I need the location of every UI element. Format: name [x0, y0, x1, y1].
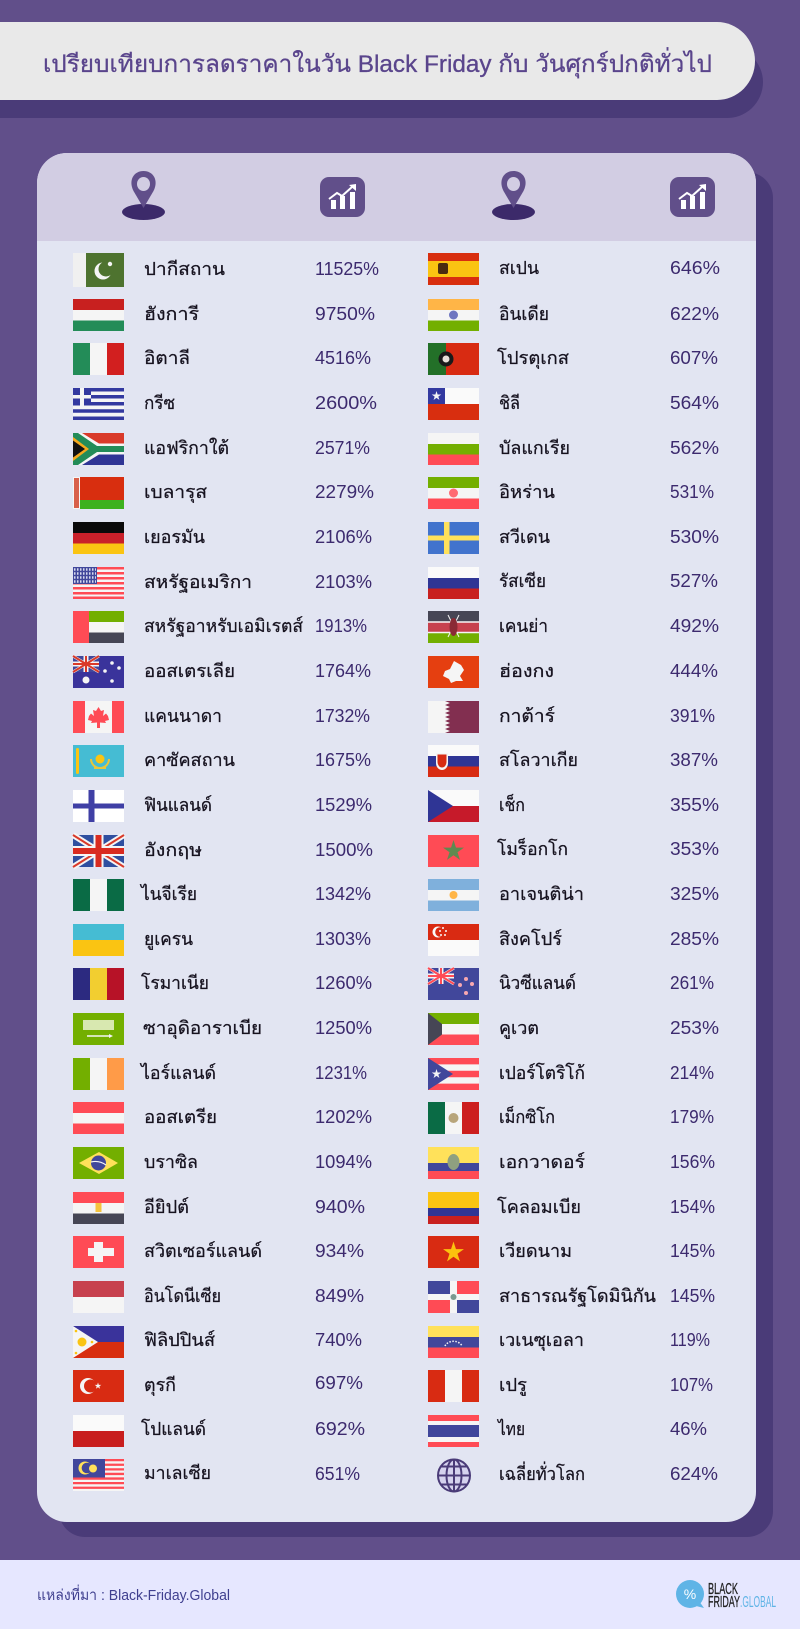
row: Egypt: อียิปต์: [144, 1197, 189, 1217]
row: Thailand: ไทย: [496, 1418, 525, 1439]
row: Malaysia: มาเลเซีย: [144, 1463, 211, 1483]
row: Russia: รัสเซีย: [499, 571, 546, 591]
flag: Ecuador: [428, 1147, 479, 1179]
row: Italy: 4516%: [315, 348, 371, 368]
row: World average: [438, 1460, 718, 1492]
row: Morocco: 353%: [670, 839, 719, 859]
row: Kazakhstan: 1675%: [315, 750, 371, 770]
row: Hungary: ฮังการี: [144, 304, 199, 324]
row: Venezuela: เวเนซุเอลา: [499, 1330, 584, 1351]
row: Peru: เปรู: [499, 1375, 527, 1396]
flag: Belarus: [73, 477, 124, 509]
icon: location pin left: [122, 171, 165, 220]
row: Kenya: [428, 611, 719, 643]
footer band: [0, 1560, 800, 1629]
row: Kenya: เคนย่า: [499, 616, 548, 636]
flag: Argentina: [428, 879, 479, 911]
flag: Turkey: [73, 1370, 124, 1402]
left column rows: [73, 253, 379, 1491]
row: Puerto Rico: เปอร์โตริโก้: [499, 1062, 585, 1083]
flag: Egypt: [73, 1192, 124, 1224]
title banner: [0, 22, 763, 118]
icon: globe: [438, 1460, 470, 1492]
row: Pakistan: 11525%: [315, 259, 379, 279]
row: Bulgaria: 562%: [670, 438, 719, 458]
row: Colombia: [428, 1192, 715, 1224]
row: Portugal: [428, 343, 718, 375]
row: Chile: 564%: [670, 393, 719, 413]
row: Austria: [73, 1102, 372, 1134]
row: Switzerland: 934%: [315, 1241, 364, 1261]
row: Morocco: [428, 835, 719, 867]
flag: United States: [73, 567, 124, 599]
row: Sweden: สวีเดน: [499, 527, 550, 547]
row: Hong Kong: [428, 656, 718, 688]
row: South Africa: แอฟริกาใต้: [144, 437, 229, 458]
row: Russia: [428, 567, 718, 599]
row: United Kingdom: 1500%: [315, 840, 373, 860]
row: Philippines: 740%: [315, 1330, 362, 1350]
row: Vietnam: 145%: [670, 1241, 715, 1261]
row: UAE: สหรัฐอาหรับเอมิเรตส์: [144, 616, 303, 637]
row: Switzerland: [73, 1236, 364, 1268]
row: Greece: [73, 388, 377, 420]
row: Colombia: 154%: [670, 1197, 715, 1217]
flag: Dominican Republic: [428, 1281, 479, 1313]
row: South Africa: 2571%: [315, 438, 370, 458]
flag: Nigeria: [73, 879, 124, 911]
flag: Greece: [73, 388, 124, 420]
row: India: อินเดีย: [499, 304, 549, 324]
row: Thailand: 46%: [670, 1419, 707, 1439]
row: Ukraine: [73, 924, 371, 956]
row: Bulgaria: [428, 433, 719, 465]
row: Nigeria: 1342%: [315, 884, 371, 904]
row: New Zealand: นิวซีแลนด์: [499, 973, 576, 993]
flag: Italy: [73, 343, 124, 375]
icon: chart right: [670, 177, 715, 217]
row: United Kingdom: อังกฤษ: [144, 840, 202, 860]
row: Bulgaria: บัลแกเรีย: [499, 438, 570, 458]
row: Czech Republic: 355%: [670, 795, 719, 815]
row: Spain: [428, 253, 720, 285]
row: Kuwait: 253%: [670, 1018, 719, 1038]
flag: Hong Kong: [428, 656, 479, 688]
row: Iran: อิหร่าน: [499, 482, 555, 502]
row: Sweden: 530%: [670, 527, 719, 547]
row: Saudi Arabia: 1250%: [315, 1018, 372, 1038]
row: Egypt: [73, 1192, 365, 1224]
flag: Slovakia: [428, 745, 479, 777]
flag: Malaysia: [73, 1459, 124, 1491]
row: Ukraine: 1303%: [315, 929, 371, 949]
flag: Ukraine: [73, 924, 124, 956]
row: New Zealand: 261%: [670, 973, 714, 993]
flag: Kazakhstan: [73, 745, 124, 777]
flag: Qatar: [428, 701, 479, 733]
flag: Spain: [428, 253, 479, 285]
row: Australia: [73, 656, 371, 688]
flag: Austria: [73, 1102, 124, 1134]
row: Kenya: 492%: [670, 616, 719, 636]
row: Kazakhstan: [73, 745, 371, 777]
row: Philippines: ฟิลิปปินส์: [144, 1330, 215, 1350]
row: Singapore: [428, 924, 719, 956]
row: Malaysia: 651%: [315, 1464, 360, 1484]
row: Slovakia: [428, 745, 718, 777]
logo: Black Friday Global: BLACK: [708, 1581, 738, 1598]
row: Ireland: [73, 1058, 367, 1090]
row: Poland: [73, 1415, 365, 1447]
row: Hungary: 9750%: [315, 304, 375, 324]
row: Belarus: เบลารุส: [144, 482, 207, 503]
flag: Finland: [73, 790, 124, 822]
row: Puerto Rico: [428, 1058, 714, 1090]
row: Spain: สเปน: [499, 258, 539, 278]
row: Iran: [428, 477, 714, 509]
flag: United Kingdom: [73, 835, 124, 867]
row: Finland: [73, 790, 372, 822]
flag: Pakistan: [73, 253, 124, 287]
row: Ecuador: เอกวาดอร์: [499, 1152, 585, 1172]
flag: Kuwait: [428, 1013, 479, 1045]
row: Singapore: สิงคโปร์: [499, 928, 562, 949]
row: Brazil: [73, 1147, 372, 1179]
flag: Brazil: [73, 1147, 124, 1179]
row: Greece: กรีซ: [144, 393, 175, 413]
row: Peru: [428, 1370, 713, 1402]
source note: แหล่งที่มา : Black-Friday.Global: [37, 1584, 230, 1604]
row: Qatar: 391%: [670, 706, 715, 726]
row: Vietnam: เวียดนาม: [499, 1241, 572, 1261]
row: Kuwait: [428, 1013, 719, 1045]
row: Finland: 1529%: [315, 795, 372, 815]
row: Finland: ฟินแลนด์: [144, 795, 212, 815]
row: Canada: 1732%: [315, 706, 370, 726]
row: Germany: [73, 522, 372, 554]
row: Czech Republic: [428, 790, 719, 822]
flag: Peru: [428, 1370, 479, 1402]
row: Thailand: [428, 1415, 707, 1447]
row: Vietnam: [428, 1236, 715, 1268]
row: India: [428, 299, 719, 331]
flag: South Africa: [73, 433, 124, 465]
row: World average: 624%: [670, 1464, 718, 1484]
row: UAE: [73, 611, 367, 643]
row: Portugal: 607%: [670, 348, 718, 368]
flag: Switzerland: [73, 1236, 124, 1268]
title: เปรียบเทียบการลดราคาในวัน Black Friday กับ วันศุกร์ปกติทั่วไป: [43, 47, 712, 79]
row: Belarus: [73, 477, 374, 509]
row: Russia: 527%: [670, 571, 718, 591]
flag: Iran: [428, 477, 479, 509]
flag: Romania: [73, 968, 124, 1000]
flag: Ireland: [73, 1058, 124, 1090]
row: Nigeria: ไนจีเรีย: [139, 883, 197, 904]
row: Canada: [73, 701, 370, 733]
row: Mexico: 179%: [670, 1107, 714, 1127]
row: Venezuela: 119%: [670, 1330, 710, 1350]
row: Czech Republic: เช็ก: [499, 793, 525, 815]
row: Austria: ออสเตรีย: [144, 1107, 217, 1127]
flag: Russia: [428, 567, 479, 599]
flag: Portugal: [428, 343, 479, 375]
row: Greece: 2600%: [315, 393, 377, 413]
row: Germany: เยอรมัน: [144, 527, 205, 547]
row: Egypt: 940%: [315, 1197, 365, 1217]
row: Slovakia: 387%: [670, 750, 718, 770]
row: Australia: ออสเตรเลีย: [144, 661, 235, 681]
row: Colombia: โคลอมเบีย: [497, 1196, 581, 1217]
row: Italy: [73, 343, 371, 375]
row: Morocco: โมร็อกโก: [497, 837, 568, 859]
row: Brazil: 1094%: [315, 1152, 372, 1172]
flag: Canada: [73, 701, 124, 733]
flag: Bulgaria: [428, 433, 479, 465]
row: Qatar: กาต้าร์: [499, 706, 555, 726]
row: Slovakia: สโลวาเกีย: [499, 749, 578, 770]
row: Austria: 1202%: [315, 1107, 372, 1127]
icon: chart left: [320, 177, 365, 217]
row: Spain: 646%: [670, 258, 720, 278]
row: Philippines: [73, 1326, 362, 1358]
row: Portugal: โปรตุเกส: [497, 347, 569, 369]
flag: Morocco: [428, 835, 479, 867]
logo: Black Friday Global: FRIDAY: [708, 1594, 740, 1611]
row: New Zealand: [428, 968, 714, 1000]
row: Italy: อิตาลี: [144, 348, 190, 368]
flag: Puerto Rico: [428, 1058, 479, 1090]
row: United States: [73, 567, 372, 599]
flag: Colombia: [428, 1192, 479, 1224]
row: Canada: แคนนาดา: [144, 706, 222, 726]
right column rows: [428, 253, 720, 1492]
row: Argentina: 325%: [670, 884, 719, 904]
row: Peru: 107%: [670, 1375, 713, 1395]
row: Dominican Republic: [428, 1281, 715, 1313]
row: South Africa: [73, 433, 370, 465]
row: Puerto Rico: 214%: [670, 1063, 714, 1083]
row: Dominican Republic: สาธารณรัฐโดมินิกัน: [499, 1285, 656, 1307]
row: Brazil: บราซิล: [144, 1152, 198, 1172]
flag: Venezuela: [428, 1326, 479, 1358]
flag: Kenya: [428, 611, 479, 643]
logo: Black Friday Global: [676, 1580, 776, 1611]
row: UAE: 1913%: [315, 616, 367, 636]
row: Switzerland: สวิตเซอร์แลนด์: [144, 1241, 262, 1261]
flag: Germany: [73, 522, 124, 554]
row: United States: สหรัฐอเมริกา: [144, 572, 252, 593]
row: Ireland: 1231%: [315, 1063, 367, 1083]
row: Turkey: ตุรกี: [144, 1375, 176, 1396]
row: Venezuela: [428, 1326, 710, 1358]
row: Singapore: 285%: [670, 929, 719, 949]
row: Germany: 2106%: [315, 527, 372, 547]
row: United States: 2103%: [315, 572, 372, 592]
flag: Poland: [73, 1415, 124, 1447]
flag: Chile: [428, 388, 479, 420]
row: Ireland: ไอร์แลนด์: [139, 1062, 216, 1083]
row: Poland: 692%: [315, 1419, 365, 1439]
row: Chile: [428, 388, 719, 420]
row: India: 622%: [670, 304, 719, 324]
row: Australia: 1764%: [315, 661, 371, 681]
row: Mexico: เม็กซิโก: [499, 1105, 555, 1127]
flag: New Zealand: [428, 968, 479, 1000]
flag: Singapore: [428, 924, 479, 956]
row: Ecuador: [428, 1147, 715, 1179]
row: Hungary: [73, 299, 375, 331]
row: Belarus: 2279%: [315, 482, 374, 502]
row: Romania: โรมาเนีย: [141, 972, 209, 993]
row: Turkey: 697%: [315, 1373, 363, 1393]
row: Saudi Arabia: ซาอุดิอาราเบีย: [143, 1018, 262, 1039]
row: Chile: ชิลี: [499, 393, 520, 413]
flag: India: [428, 299, 479, 331]
row: Hong Kong: 444%: [670, 661, 718, 681]
row: Qatar: [428, 701, 715, 733]
row: Romania: [73, 968, 372, 1000]
row: Iran: 531%: [670, 482, 714, 502]
row: Mexico: [428, 1102, 714, 1134]
flag: Australia: [73, 656, 124, 688]
row: United Kingdom: [73, 835, 373, 867]
row: Turkey: [73, 1370, 363, 1402]
row: Indonesia: 849%: [315, 1286, 364, 1306]
row: Pakistan: [73, 253, 379, 287]
row: Kuwait: คูเวต: [499, 1018, 539, 1039]
flag: Sweden: [428, 522, 479, 554]
row: Ecuador: 156%: [670, 1152, 715, 1172]
row: Pakistan: ปากีสถาน: [144, 259, 225, 279]
flag: Mexico: [428, 1102, 479, 1134]
panel: ranking table: [37, 153, 773, 1537]
row: Indonesia: อินโดนีเซีย: [144, 1285, 221, 1306]
row: Malaysia: [73, 1459, 360, 1491]
row: Sweden: [428, 522, 719, 554]
row: Ukraine: ยูเครน: [144, 929, 193, 950]
row: Poland: โปแลนด์: [141, 1418, 206, 1439]
flag: Hungary: [73, 299, 124, 331]
row: Nigeria: [73, 879, 371, 911]
flag: Thailand: [428, 1415, 479, 1447]
flag: Saudi Arabia: [73, 1013, 124, 1045]
row: Argentina: [428, 879, 719, 911]
flag: Indonesia: [73, 1281, 124, 1313]
row: Indonesia: [73, 1281, 364, 1313]
flag: UAE: [73, 611, 124, 643]
row: Dominican Republic: 145%: [670, 1286, 715, 1306]
row: World average: เฉลี่ยทั่วโลก: [499, 1461, 585, 1484]
row: Hong Kong: ฮ่องกง: [499, 661, 554, 681]
icon: location pin right: [492, 171, 535, 220]
row: Argentina: อาเจนติน่า: [499, 884, 584, 904]
row: Saudi Arabia: [73, 1013, 372, 1045]
flag: Czech Republic: [428, 790, 479, 822]
row: Romania: 1260%: [315, 973, 372, 993]
row: Kazakhstan: คาซัคสถาน: [144, 750, 235, 770]
flag: Philippines: [73, 1326, 124, 1358]
flag: Vietnam: [428, 1236, 479, 1268]
logo: Black Friday Global: %: [684, 1586, 696, 1602]
